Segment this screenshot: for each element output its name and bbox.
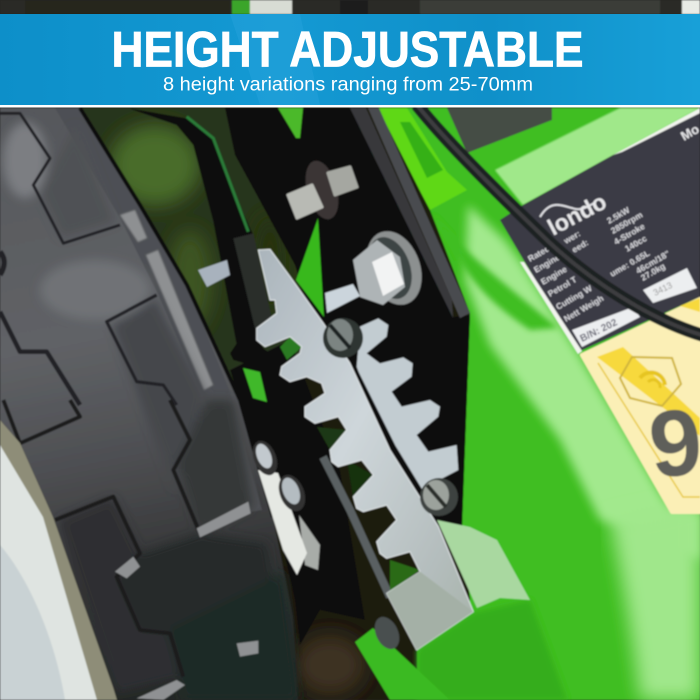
tread shading [3, 122, 298, 700]
label spec values: 2850rpm [609, 209, 645, 236]
label spec values: 4-Stroke [612, 221, 647, 247]
mounting screws [248, 437, 404, 653]
top strip of photo above banner [0, 0, 700, 14]
label spec values: 27.0kg [639, 261, 667, 283]
label spec values: Rated [526, 243, 551, 264]
second serial box: 3413 [651, 280, 674, 298]
dark housing top right [447, 108, 552, 153]
tire outer edge [80, 108, 273, 517]
label spec values: Nett Weigh [562, 293, 605, 324]
dark grey rails beside plate [350, 108, 470, 318]
black power cable [417, 105, 700, 336]
shoulder highlights [120, 210, 213, 390]
small metal tab [198, 260, 230, 287]
batch number box [572, 307, 640, 347]
label spec values: Petrol T [546, 274, 579, 299]
white wheel hub [0, 420, 117, 700]
main comb bracket [257, 249, 473, 650]
label brand text: londo [543, 188, 611, 240]
label spec values: 140cc [623, 233, 649, 254]
tire shoulder [55, 108, 262, 512]
spec label [500, 108, 700, 354]
green wedge behind plate [296, 218, 324, 317]
black mounting plate [225, 108, 470, 530]
label spec values: Cutting W [554, 283, 595, 312]
banner subtitle: 8 height variations ranging from 25-70mm [163, 74, 533, 96]
label spec values: Engine [532, 252, 562, 275]
white roller [258, 470, 320, 575]
tire [0, 108, 298, 700]
banner background [0, 14, 700, 108]
batch number box: B/N: 202 [578, 317, 620, 345]
label spec values: 2.5kW [605, 204, 632, 226]
green plastic tab [378, 108, 467, 210]
green mower deck [378, 108, 700, 700]
rear comb bracket [353, 318, 458, 507]
black operating lever [130, 108, 287, 373]
black wheel bracket [230, 340, 365, 645]
hexagon icon [620, 357, 681, 406]
banner title: HEIGHT ADJUSTABLE [112, 22, 584, 78]
green sliver at top [278, 108, 303, 138]
label logo swoosh [540, 202, 596, 217]
inner metal link [323, 457, 390, 597]
slotted screws [323, 318, 458, 516]
hex nut [353, 223, 431, 313]
label spec values: ume: 0.65L [608, 248, 651, 279]
label spec values: eed: [570, 237, 590, 255]
label spec values: 46cm/18" [634, 248, 672, 276]
yellow warning sticker [582, 298, 700, 512]
second serial box [643, 268, 697, 303]
lower green deck strip [355, 628, 450, 700]
rear plate metal tab [325, 284, 360, 313]
label spec values: Engine [539, 264, 569, 287]
green gaps between comb teeth [243, 337, 420, 592]
tread grooves and highlights lower [3, 400, 258, 700]
label spec values: wer: [561, 228, 582, 246]
translucent tape on deck [437, 520, 530, 608]
label spec values [526, 204, 672, 324]
bolt pin [288, 157, 357, 223]
tread grooves upper [0, 113, 177, 405]
darker lower deck [417, 600, 567, 700]
